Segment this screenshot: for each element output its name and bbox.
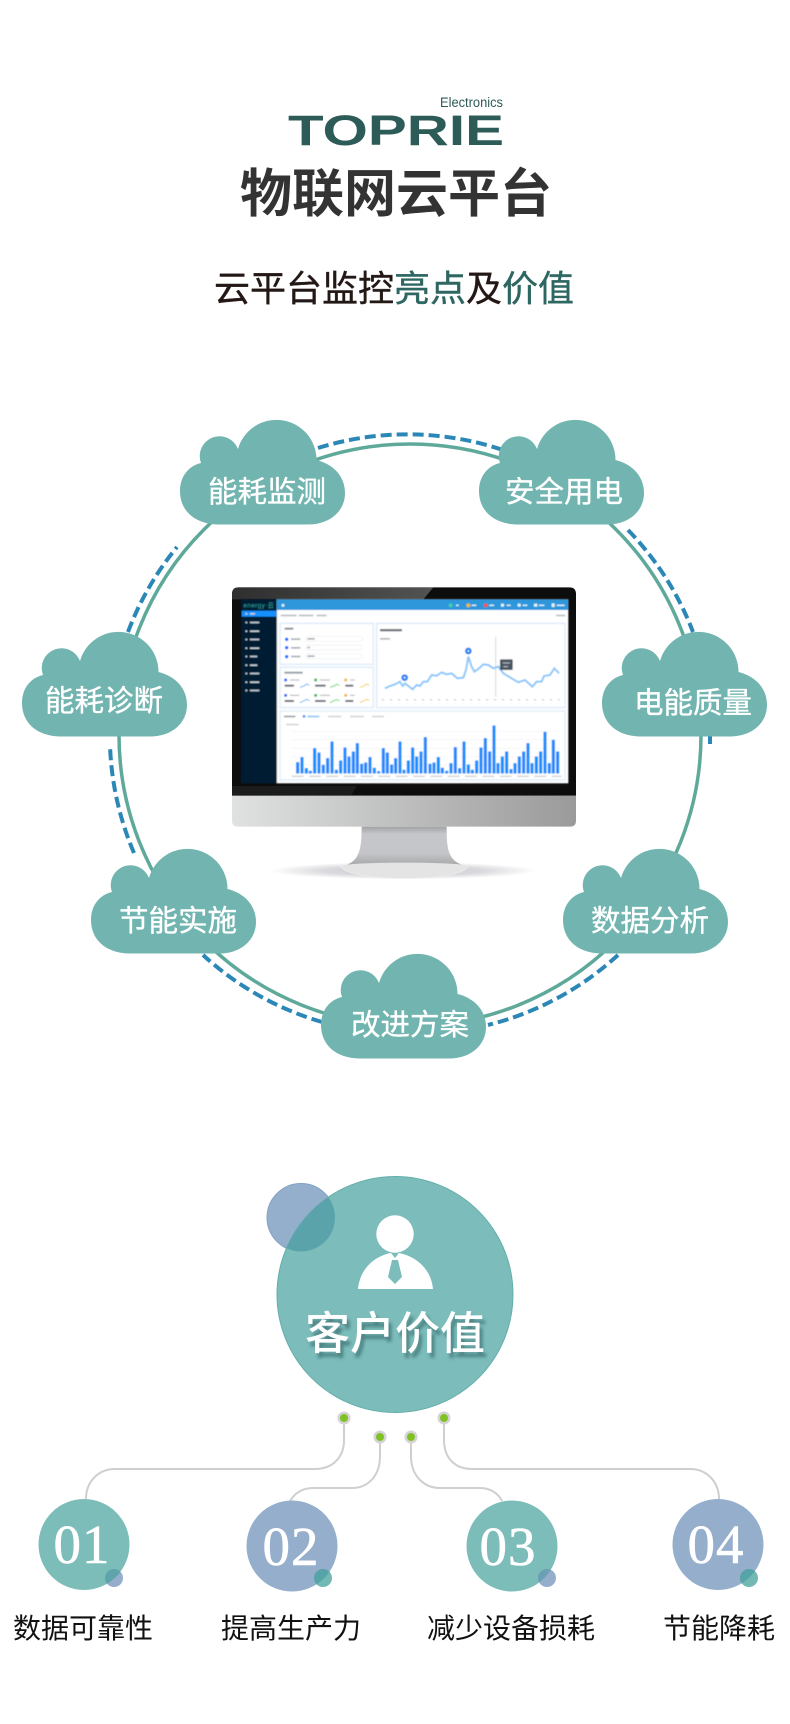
connector dot 2 [374,1430,386,1444]
main teal circle [277,1176,513,1412]
dashboard top bar [277,599,568,610]
value item 03: 减少设备损耗 [427,1613,595,1644]
logo: TOPRIE Electronics: TOPRIE [288,107,504,155]
cloud: 安全用电 [479,420,644,524]
dashboard panel: line chart [377,623,565,708]
dashboard panel: stats [280,667,373,708]
monitor with dashboard [232,587,576,879]
dashboard panel: bar chart [280,711,565,780]
cloud: 安全用电: 安全用电 [505,476,623,509]
logo: TOPRIE Electronics: Electronics [440,95,503,110]
dashboard sidebar [241,599,277,783]
cloud: 节能实施: 节能实施 [119,905,237,938]
value item 04: 节能降耗 [663,1613,775,1644]
value item 01 [13,1499,153,1644]
title: 物联网云平台 [240,166,552,224]
value item 03 [427,1500,595,1644]
heading: 客户价值: 客户价值 [305,1308,485,1359]
value item 03: 03 [480,1516,536,1577]
cloud: 能耗监测 [180,420,345,524]
connector dot 3 [404,1430,418,1444]
cloud: 能耗诊断 [22,632,187,736]
connector: 01 [86,1418,344,1499]
value item 02 [221,1500,361,1644]
connector: 04 [444,1418,719,1499]
cloud: 数据分析: 数据分析 [591,905,709,938]
value item 04 [663,1499,775,1644]
cloud: 能耗诊断: 能耗诊断 [45,685,163,718]
value item 02: 02 [262,1516,320,1577]
dashboard breadcrumb [281,615,565,616]
connector: 02 [290,1437,380,1501]
ring: cycle of cloud services [110,434,710,1026]
cloud: 改进方案 [321,954,486,1058]
dashboard sidebar: energy·云 [243,601,274,609]
value item 01: 数据可靠性 [13,1613,153,1644]
dashboard panel: selects [280,623,373,664]
value item 04: 04 [688,1514,744,1575]
cloud: 电能质量 [602,632,767,736]
circle overlap [287,1198,335,1252]
cloud: 数据分析 [563,849,728,954]
panel: customer value circle [267,1176,513,1412]
connector: 03 [411,1437,502,1501]
monitor base plate [340,861,468,878]
connector dot 1 [338,1412,350,1424]
connector dot 4 [438,1412,450,1424]
dashboard screen [241,599,568,783]
monitor bezel [232,587,576,796]
value item 01: 01 [54,1514,110,1575]
cloud: 电能质量: 电能质量 [634,687,752,720]
icon: person [358,1215,433,1289]
cloud: 改进方案: 改进方案 [351,1009,469,1042]
logo: TOPRIE Electronics [288,95,504,155]
subtitle: 云平台监控亮点及价值 [214,268,574,309]
monitor stand shadow [270,862,537,879]
decorative blue circle [267,1184,335,1252]
cloud: 节能实施 [91,849,256,954]
value item 02: 提高生产力 [221,1613,361,1644]
monitor chin [232,796,576,827]
cloud: 能耗监测: 能耗监测 [208,476,326,509]
monitor neck [347,827,462,865]
